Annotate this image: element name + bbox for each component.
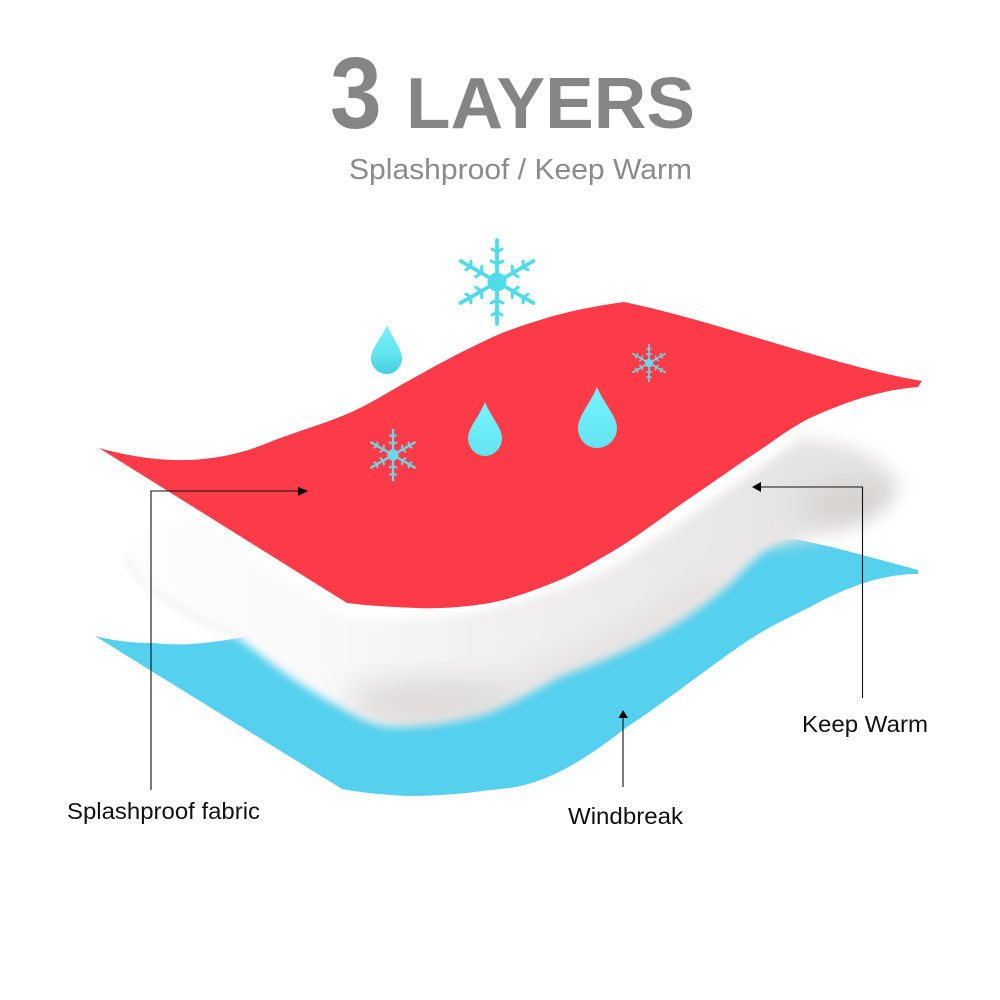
label: windbreak: Windbreak bbox=[568, 803, 683, 829]
icon: water drop center bbox=[468, 402, 502, 456]
arrow: windbreak bbox=[618, 710, 628, 787]
label: keep warm: Keep Warm bbox=[802, 711, 928, 737]
icon: water drop above red bbox=[371, 325, 402, 374]
title word: LAYERS: LAYERS bbox=[406, 63, 695, 144]
icon: snowflake on red bbox=[369, 430, 417, 480]
red splashproof layer bbox=[99, 302, 922, 608]
icon: small snowflake right bbox=[632, 345, 666, 381]
title numeral: 3 bbox=[330, 36, 382, 150]
icon: large snowflake bbox=[458, 240, 536, 324]
white insulation layer bbox=[201, 434, 903, 734]
icon: water drop right bbox=[578, 387, 617, 448]
label: splashproof fabric: Splashproof fabric bbox=[67, 798, 260, 824]
subtitle: Splashproof / Keep Warm bbox=[349, 154, 692, 186]
blue windbreak layer bbox=[95, 539, 918, 796]
arrow: splashproof fabric bbox=[151, 487, 308, 790]
arrow: keep warm bbox=[752, 482, 862, 698]
